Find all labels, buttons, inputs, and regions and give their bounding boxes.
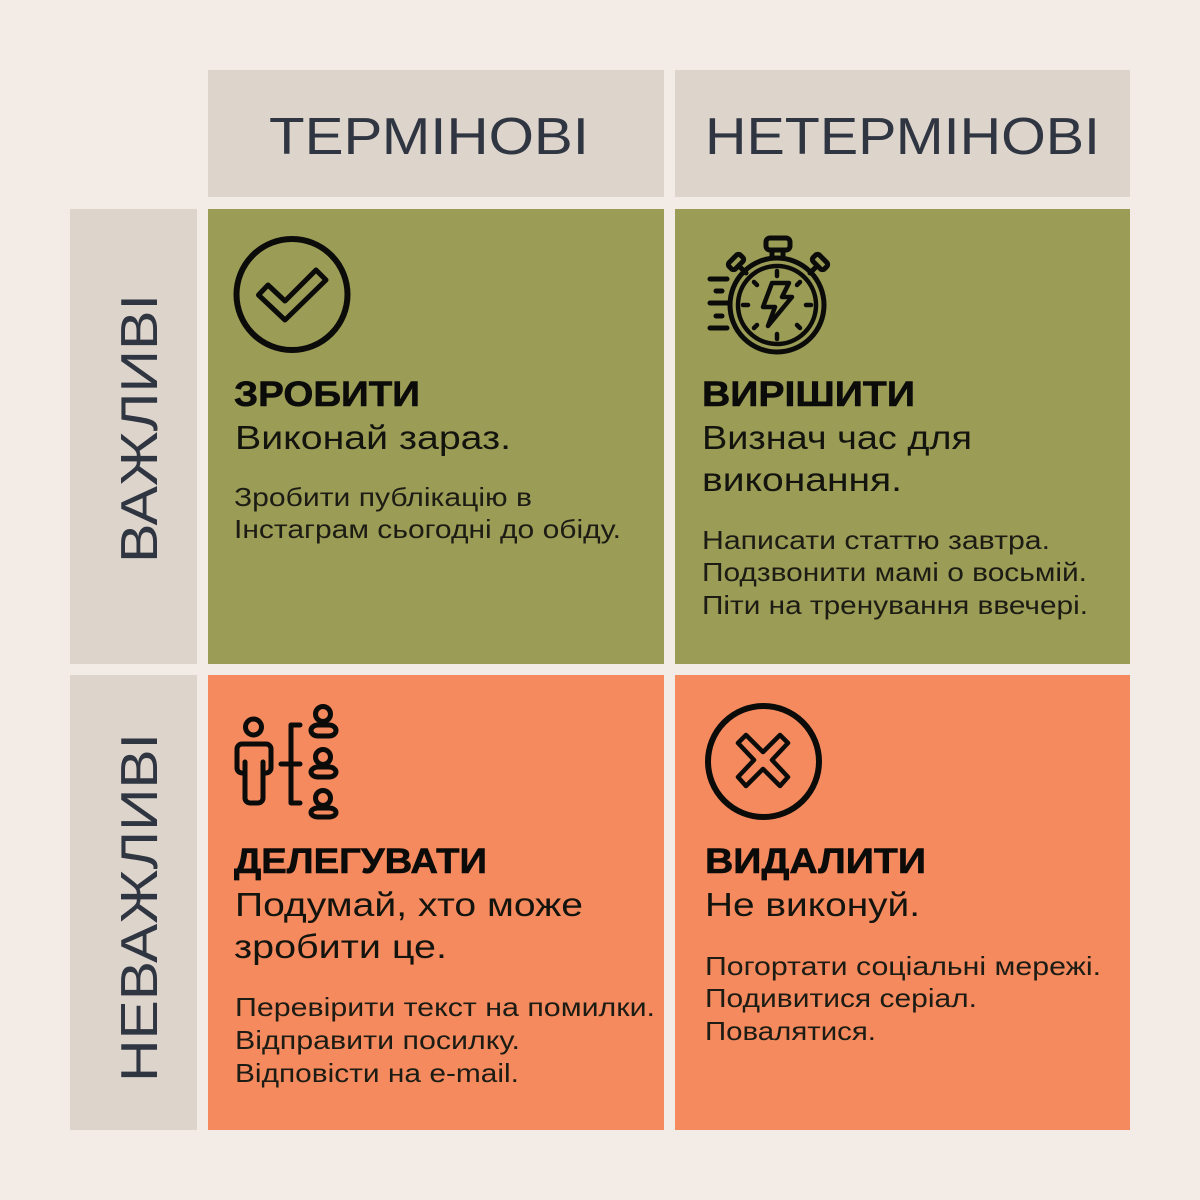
heading: delete: ВИДАЛИТИ [705,842,926,881]
panel: decide [675,209,1130,664]
panel: delete [675,675,1130,1130]
examples: delete: Повалятися. [705,1016,876,1046]
subheading: delegate: Подумай, хто може [235,886,583,923]
row header: not important: НЕВАЖЛИВІ [111,733,169,1082]
row header: not important [70,675,197,1130]
subheading: delete: Не виконуй. [705,886,920,923]
subheading: do: Виконай зараз. [235,419,511,456]
examples: delete: Подивитися серіал. [705,983,977,1013]
row header: important: ВАЖЛИВІ [111,294,169,563]
icon: cross in circle [708,706,819,817]
examples: do: Зробити публікацію в [234,482,532,512]
subheading: decide [702,419,972,498]
column header: not urgent [675,70,1130,197]
column header: urgent [208,70,664,197]
panel: do [208,209,664,664]
examples: do: Інстаграм сьогодні до обіду. [234,514,621,544]
examples: delegate: Перевірити текст на помилки. [235,992,655,1022]
examples: do [234,482,621,544]
icon: check mark in circle [236,239,348,350]
icon: person delegating to a group [237,706,336,817]
examples: decide: Піти на тренування ввечері. [702,590,1088,620]
row header: important [70,209,197,664]
panel: delegate [208,675,664,1130]
examples: decide: Подзвонити мамі о восьмій. [702,557,1087,587]
examples: decide [702,525,1088,620]
subheading: delegate: зробити це. [234,928,447,965]
examples: delegate: Відповісти на e-mail. [235,1058,519,1088]
examples: delete [705,951,1101,1046]
column header: urgent: ТЕРМІНОВІ [269,108,589,166]
icon: stopwatch with lightning bolt [710,238,829,352]
examples: decide: Написати статтю завтра. [702,525,1050,555]
examples: delete: Погортати соціальні мережі. [705,951,1101,981]
column header: not urgent: НЕТЕРМІНОВІ [705,108,1100,166]
examples: delegate [235,992,655,1088]
heading: delegate: ДЕЛЕГУВАТИ [234,842,487,881]
heading: do: ЗРОБИТИ [234,375,420,414]
heading: decide: ВИРІШИТИ [702,375,915,414]
subheading: decide: Визнач час для [702,419,972,456]
subheading: delegate [234,886,583,965]
examples: delegate: Відправити посилку. [235,1025,520,1055]
subheading: decide: виконання. [702,461,902,498]
